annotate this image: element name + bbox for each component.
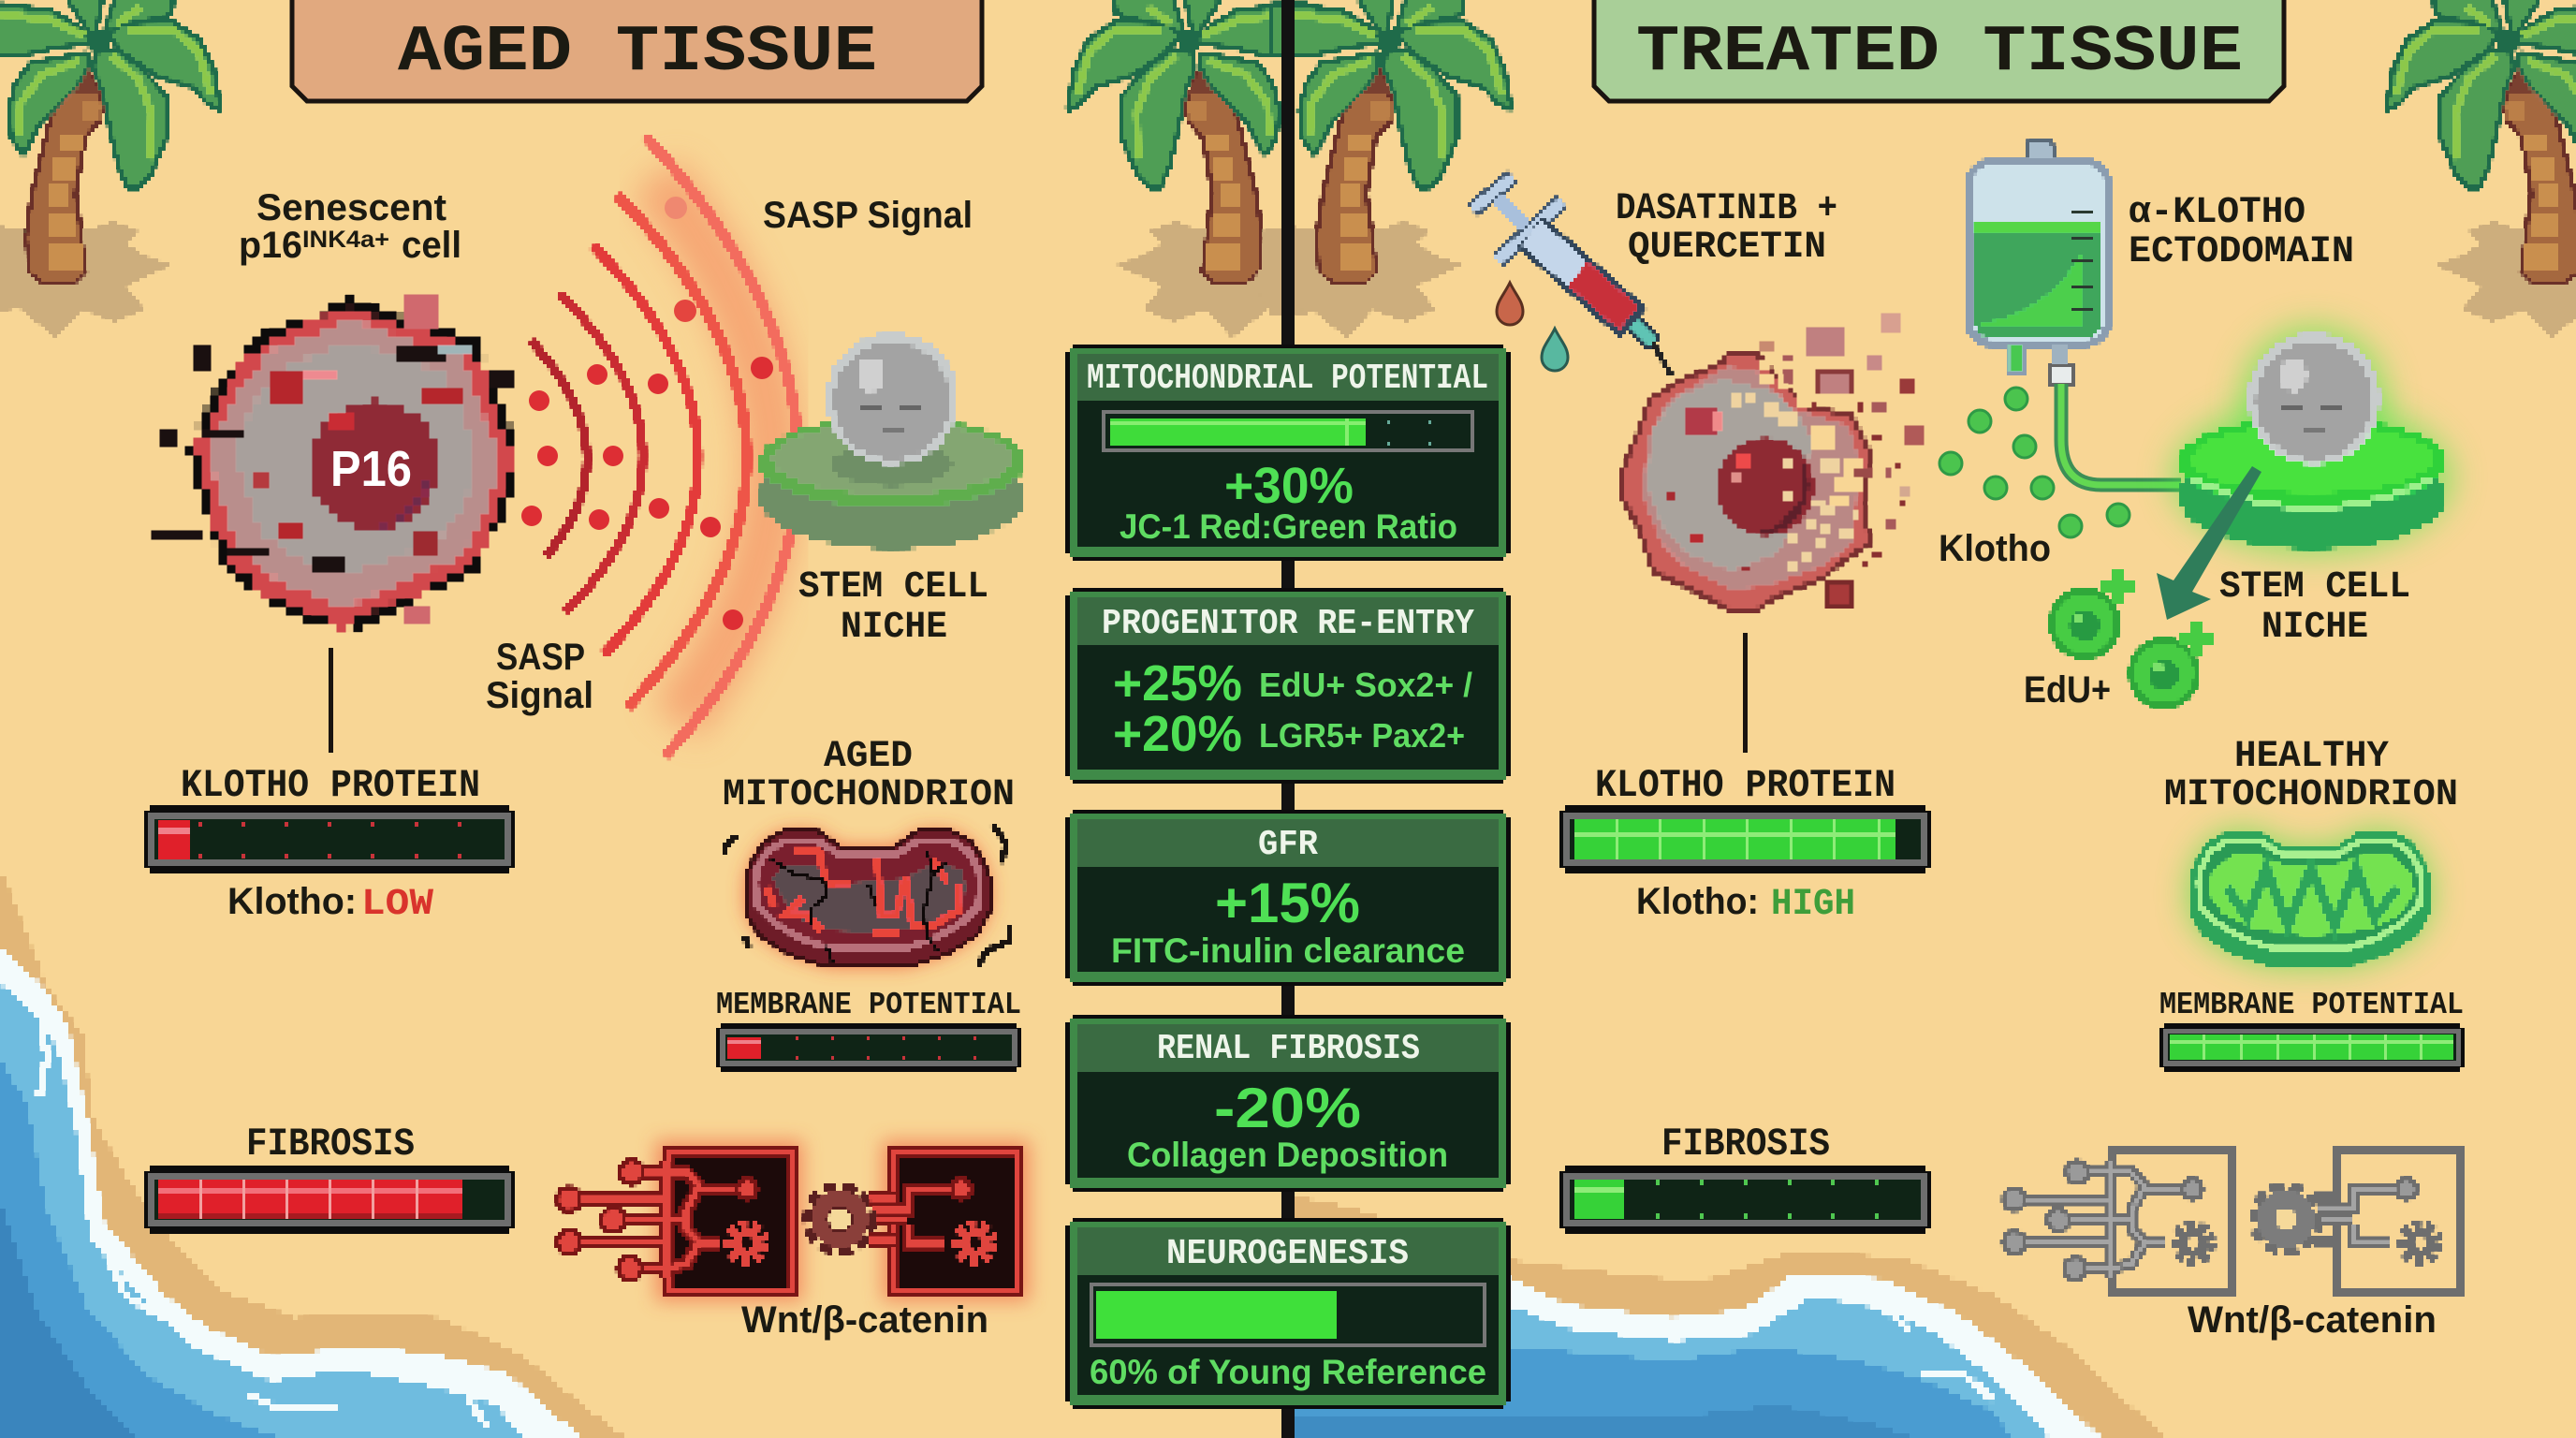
label: SASP signal bottom bbox=[486, 637, 593, 716]
bar: fibrosis aged high bbox=[144, 1166, 515, 1234]
bar: klotho treated high bbox=[1559, 805, 1931, 873]
caption: JC-1 Red:Green Ratio bbox=[1120, 507, 1457, 546]
label: stem cell niche treated bbox=[2219, 566, 2410, 649]
stem cell niche aged bbox=[759, 333, 1025, 549]
icon: syringe bbox=[1472, 177, 1671, 374]
icon: Wnt circuit treated bbox=[2004, 1152, 2462, 1292]
label: alpha klotho ectodomain bbox=[2129, 192, 2354, 273]
panel: GFR bbox=[1065, 810, 1511, 986]
IV tube inner bbox=[2061, 384, 2181, 485]
label: stem cell niche aged: NICHE bbox=[841, 607, 947, 649]
label: aged mitochondrion bbox=[723, 736, 1015, 816]
label: klotho protein aged: KLOTHO PROTEIN bbox=[181, 763, 480, 808]
value: +30% bbox=[1224, 458, 1354, 514]
values: LGR5+ Pax2+ bbox=[1259, 716, 1465, 755]
panel title: NEUROGENESIS bbox=[1166, 1234, 1409, 1274]
values: +20% bbox=[1113, 706, 1242, 762]
connector line treated bbox=[1743, 633, 1748, 753]
icon: palm tree far right bbox=[2387, 0, 2576, 337]
title banner: treated tissue bbox=[1594, 0, 2284, 101]
label: dasatinib quercetin: DASATINIB + bbox=[1616, 188, 1837, 230]
values: EdU+ Sox2+ / bbox=[1259, 666, 1472, 704]
title banner: aged tissue bbox=[292, 0, 982, 101]
label: healthy mitochondrion: MITOCHONDRION bbox=[2164, 774, 2458, 816]
value: +15% bbox=[1215, 872, 1360, 934]
icon: palm tree centre left bbox=[1068, 0, 1325, 337]
label: senescent cell: cell bbox=[402, 225, 461, 266]
label: SASP signal top: SASP Signal bbox=[763, 195, 973, 236]
label: stem cell niche treated: STEM CELL bbox=[2219, 566, 2410, 609]
stem cell niche treated bbox=[2172, 326, 2452, 554]
icon: Wnt circuit aged bbox=[558, 1140, 1030, 1301]
label: dasatinib quercetin: QUERCETIN bbox=[1628, 227, 1826, 269]
label: senescent cell bbox=[239, 187, 461, 266]
label: aged mitochondrion: MITOCHONDRION bbox=[723, 774, 1015, 816]
label: klotho high: HIGH bbox=[1771, 884, 1855, 926]
caption: 60% of Young Reference bbox=[1090, 1353, 1486, 1391]
dying senescent cell bbox=[1624, 314, 1924, 609]
icon: palm tree far left bbox=[0, 0, 220, 337]
label: klotho low bbox=[227, 881, 433, 926]
title banner: treated tissue: TREATED TISSUE bbox=[1636, 16, 2243, 90]
label: klotho low: LOW bbox=[361, 884, 433, 926]
label: klotho high: Klotho: bbox=[1636, 881, 1759, 922]
label: membrane potential aged: MEMBRANE POTENTIAL bbox=[716, 988, 1021, 1022]
progress bar bbox=[1102, 410, 1474, 452]
panel title: GFR bbox=[1258, 825, 1318, 865]
label: Wnt aged: Wnt/β-catenin bbox=[741, 1299, 988, 1341]
label: stem cell niche aged bbox=[798, 566, 988, 649]
SASP signal waves bbox=[521, 136, 798, 756]
bar: membrane potential aged low bbox=[716, 1023, 1021, 1072]
icon: drug droplets bbox=[1497, 283, 1568, 371]
icon: healthy mitochondrion bbox=[2189, 831, 2430, 966]
label: Wnt treated: Wnt/β-catenin bbox=[2188, 1299, 2437, 1341]
centre divider line bbox=[1281, 0, 1295, 1438]
label: healthy mitochondrion: HEALTHY bbox=[2234, 736, 2389, 778]
label: senescent cell: p16 bbox=[239, 225, 302, 266]
panel title: PROGENITOR RE-ENTRY bbox=[1102, 604, 1474, 644]
bar: membrane potential treated bbox=[2159, 1023, 2465, 1072]
panel: progenitor re-entry bbox=[1065, 588, 1511, 784]
panel: renal fibrosis bbox=[1065, 1015, 1511, 1192]
label: klotho high bbox=[1636, 881, 1855, 926]
ocean: right shoreline bbox=[1295, 1196, 2164, 1438]
label: P16 nucleus: P16 bbox=[330, 441, 412, 497]
label: senescent cell: INK4a+ bbox=[302, 227, 389, 253]
panel title: MITOCHONDRIAL POTENTIAL bbox=[1087, 359, 1488, 399]
label: stem cell niche aged: STEM CELL bbox=[798, 566, 988, 609]
label: stem cell niche treated: NICHE bbox=[2261, 607, 2368, 649]
icon: EdU+ cells bbox=[2049, 571, 2214, 709]
bar: fibrosis treated low bbox=[1559, 1166, 1931, 1234]
values: +25% bbox=[1113, 655, 1242, 712]
label: klotho: Klotho bbox=[1939, 528, 2051, 569]
label: membrane potential treated: MEMBRANE POTENTIAL bbox=[2159, 988, 2464, 1022]
label: fibrosis treated: FIBROSIS bbox=[1661, 1122, 1830, 1167]
senescent cell illustration bbox=[154, 298, 515, 630]
label: dasatinib quercetin bbox=[1616, 188, 1837, 269]
values bbox=[1113, 655, 1472, 762]
value: -20% bbox=[1214, 1077, 1361, 1139]
connector line aged bbox=[329, 648, 333, 753]
progress bar bbox=[1090, 1283, 1486, 1347]
label: fibrosis aged: FIBROSIS bbox=[246, 1122, 415, 1167]
title banner: aged tissue: AGED TISSUE bbox=[398, 16, 877, 90]
label: healthy mitochondrion bbox=[2164, 736, 2458, 816]
label: klotho low: Klotho: bbox=[227, 881, 357, 922]
caption: Collagen Deposition bbox=[1127, 1136, 1448, 1174]
label: alpha klotho ectodomain: ECTODOMAIN bbox=[2129, 231, 2354, 273]
icon: aged mitochondrion bbox=[725, 826, 1009, 966]
label: SASP signal bottom: Signal bbox=[486, 675, 593, 716]
caption: FITC-inulin clearance bbox=[1111, 932, 1465, 970]
panel: mitochondrial potential bbox=[1065, 345, 1511, 561]
bar: klotho aged low bbox=[144, 805, 515, 873]
label: alpha klotho ectodomain: α-KLOTHO bbox=[2129, 192, 2305, 234]
arrow: niche to progeny bbox=[2157, 466, 2261, 620]
label: klotho protein treated: KLOTHO PROTEIN bbox=[1595, 763, 1895, 808]
panel title: RENAL FIBROSIS bbox=[1157, 1029, 1420, 1069]
ocean: left shoreline bbox=[0, 869, 624, 1438]
icon: IV bag bbox=[1969, 140, 2108, 384]
panel: neurogenesis bbox=[1065, 1218, 1511, 1409]
klotho particles bbox=[1939, 388, 2130, 537]
IV tube bbox=[2061, 384, 2181, 485]
label: EdU+: EdU+ bbox=[2024, 669, 2111, 711]
label: senescent cell: Senescent bbox=[256, 187, 446, 228]
label: aged mitochondrion: AGED bbox=[824, 736, 913, 778]
label: SASP signal bottom: SASP bbox=[496, 637, 585, 678]
icon: palm tree centre right bbox=[1253, 0, 1511, 337]
